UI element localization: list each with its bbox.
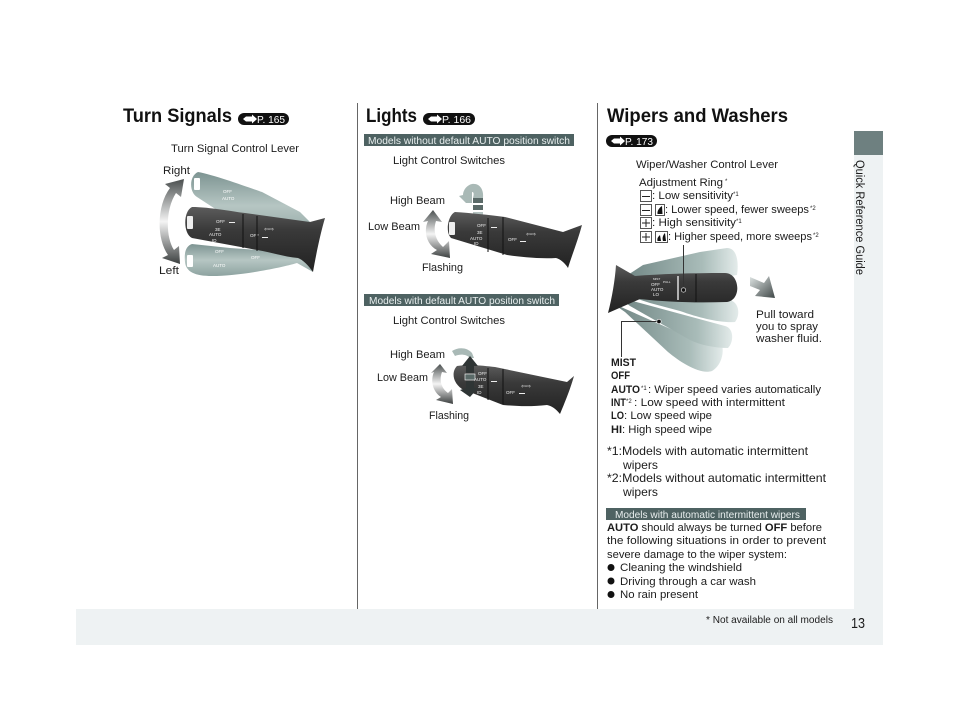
wiper modes list: : Low speed wipe [624,410,712,422]
lever: 3E [477,230,483,235]
page reference 173 [606,135,657,148]
auto warning text: AUTO should always be turned OFF before [607,522,822,534]
badge: without auto: Models without default AUTO position switch [368,136,570,147]
label: flashing: Flashing [429,410,469,422]
adjustment ring legend: *1 [736,219,742,225]
label: left: Left [159,265,179,277]
wiper modes list: *2 [626,399,632,405]
label: pull toward: washer fluid. [755,333,822,345]
wiper modes list: *1 [641,386,647,392]
arrow: right and left arc [160,179,184,264]
lever: ⇦⇨ [521,384,531,390]
lever: ID [477,390,482,395]
lever: 3E [478,384,484,389]
page reference 165: P. 165 [257,115,285,126]
lever: active position: AUTO [209,232,222,237]
page reference 165 [238,113,289,126]
side band [854,131,883,645]
lever: lower ghost position: OFF [215,249,224,254]
lever: AUTO [470,236,483,241]
page reference 173: P. 173 [625,137,653,148]
adjustment ring legend: *1 [733,192,739,198]
wiper modes list: LO [611,410,624,422]
side heading: Quick Reference Guide [853,160,865,275]
wiper modes list: INT [611,397,626,409]
label: pull toward: Pull toward [756,309,814,321]
lever label: Turn Signal Control Lever [171,143,299,155]
lever: upper ghost position: OFF [223,189,232,194]
leader line: modes [622,319,661,357]
adjustment ring legend: : High sensitivity [652,217,737,229]
footnotes: wipers [622,458,658,472]
lever [448,212,582,268]
leader line: adjustment ring [681,245,686,292]
label: control lever: Wiper/Washer Control Lever [636,159,778,171]
adjustment ring legend [639,177,819,243]
panel: turn signals [123,105,325,277]
panel: lights [364,105,582,422]
auto warning text [607,522,826,561]
lever: lower ghost position [185,244,313,276]
arrow: high and low beam arc [423,210,450,258]
label: light control switches: Light Control Switches [393,315,505,327]
bullet list [608,562,756,601]
adjustment ring legend: *2 [810,206,816,212]
lever fan: ghost positions [612,248,738,372]
heading: lights: Lights [366,105,417,127]
label: high beam: High Beam [390,195,445,207]
label: high beam: High Beam [390,349,445,361]
label: pull toward [755,309,822,345]
badge: with auto: Models with default AUTO position switch [369,296,555,307]
footer note: * Not available on all models [706,615,833,626]
arrow: high and low beam arc [431,364,453,404]
lever: active position: PULL [663,280,671,284]
footnotes [607,444,827,499]
arrow: ring rotation up and down [452,348,478,397]
lever: active position: LO [653,292,660,297]
lever: active position: 3E [215,227,221,232]
label: right: Right [163,165,190,177]
auto warning text: severe damage to the wiper system: [607,549,787,561]
lever: active position [608,265,737,313]
adjustment ring legend: * [725,179,728,185]
footnotes: *2:Models without automatic intermittent [607,471,827,485]
wiper modes list: : Wiper speed varies automatically [648,384,822,396]
bullet list: Driving through a car wash [620,576,756,588]
adjustment ring legend: Adjustment Ring [639,177,723,189]
lever: active position [185,207,325,272]
lever: active position: MIST [653,277,660,281]
bottom band [76,609,883,645]
lever: active position: ID [212,238,217,243]
adjustment ring legend: *2 [813,233,819,239]
wiper modes list: HI [611,424,622,436]
wiper modes list: AUTO [611,384,640,396]
lever: active position: OFF [651,282,660,287]
heading: turn signals: Turn Signals [123,105,232,127]
heading: wipers and washers: Wipers and Washers [607,105,788,127]
adjustment ring legend: : Higher speed, more sweeps [668,231,812,243]
footnotes: *1:Models with automatic intermittent [607,444,809,458]
page reference 166: P. 166 [442,115,471,126]
lever: lower ghost position: OFF [251,255,260,260]
wiper modes list: : Low speed with intermittent [634,397,785,409]
lever: ID [474,241,479,246]
arrow: ring rotation [459,184,483,217]
lever: upper ghost position: AUTO [222,196,235,201]
lever [454,365,574,414]
label: flashing: Flashing [422,262,463,274]
lever: active position: OFF [216,219,225,224]
lever: upper ghost position [191,172,318,240]
label: pull toward: you to spray [756,321,819,333]
arrow: pull toward you [750,276,775,298]
lever: AUTO [474,377,487,382]
adjustment ring legend: : Low sensitivity [652,190,734,202]
wiper modes list: : High speed wipe [622,424,712,436]
bullet list: Cleaning the windshield [620,562,742,574]
wiper modes list [611,357,822,436]
badge: automatic intermittent wipers: Models with automatic intermittent wipers [615,510,800,521]
lever: OFF [478,371,487,376]
lever: OFF [477,223,486,228]
lever: lower ghost position: AUTO [213,263,226,268]
side tab [854,131,883,155]
adjustment ring legend: : Lower speed, fewer sweeps [665,204,809,216]
lever: active position: ⇦⇨ [264,227,274,233]
lever: active position: AUTO [651,287,664,292]
wiper modes list: OFF [611,370,630,382]
lever: ⇦⇨ [526,232,536,238]
wiper modes list: MIST [611,357,636,369]
footnotes: wipers [622,485,658,499]
page number: 13 [851,615,865,632]
label: light control switches: Light Control Switches [393,155,505,167]
lever: active position: OFF [250,233,259,238]
panel: wipers and washers [606,105,827,601]
label: low beam: Low Beam [368,221,420,233]
bullet list: No rain present [620,589,698,601]
page reference 166 [423,113,475,126]
lever: OFF [506,390,515,395]
label: low beam: Low Beam [377,372,428,384]
auto warning text: the following situations in order to prevent [607,535,826,547]
lever: OFF [508,237,517,242]
